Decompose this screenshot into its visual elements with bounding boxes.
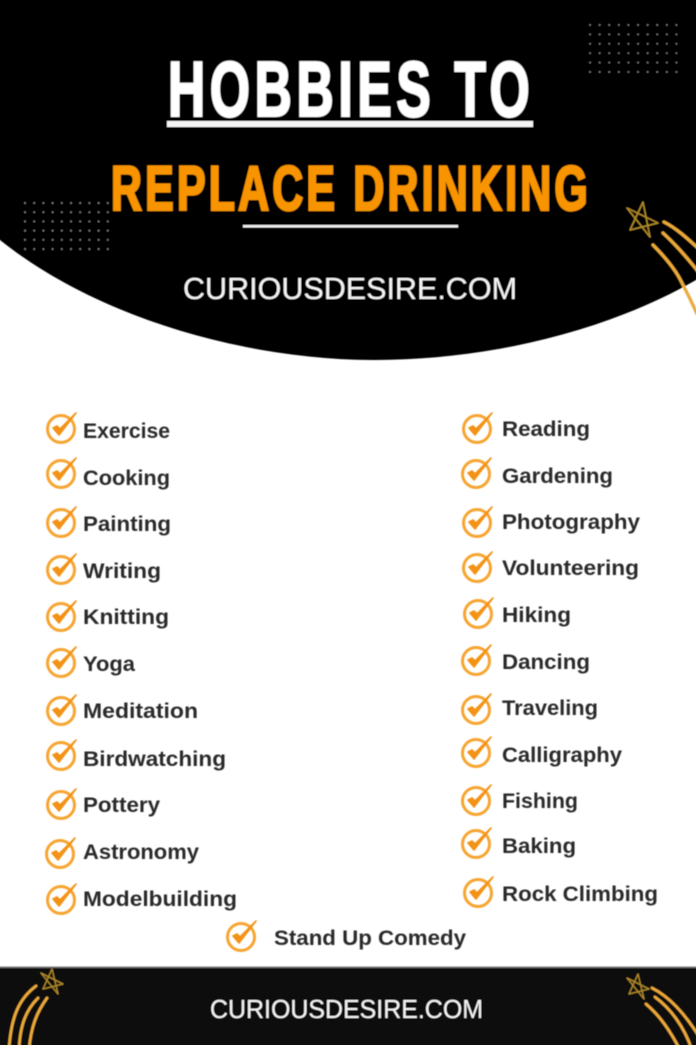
divider line xyxy=(243,225,458,228)
footer bar xyxy=(0,967,696,1045)
item: Cooking xyxy=(48,458,170,490)
item: Volunteering: Volunteering xyxy=(502,557,639,580)
item: Astronomy: Astronomy xyxy=(83,841,199,864)
item: Painting: Painting xyxy=(83,513,171,536)
item: Fishing: Fishing xyxy=(502,790,578,813)
item: Astronomy xyxy=(46,838,199,868)
footer top edge xyxy=(0,966,696,968)
item: Calligraphy: Calligraphy xyxy=(502,744,622,767)
item: Dancing xyxy=(462,645,590,674)
item: Writing xyxy=(48,554,161,584)
item: Gardening: Gardening xyxy=(502,465,613,488)
item: Photography xyxy=(464,507,640,536)
item: Exercise: Exercise xyxy=(83,420,170,443)
item: Knitting xyxy=(48,601,169,630)
item: Hiking xyxy=(464,598,571,628)
item: Rock Climbing xyxy=(464,877,658,906)
item: Birdwatching xyxy=(48,740,226,771)
footer url: CURIOUSDESIRE.COM xyxy=(210,994,483,1024)
item: Volunteering xyxy=(464,552,639,582)
icon: shooting star top right xyxy=(627,202,696,314)
item: Writing: Writing xyxy=(83,560,161,583)
right hobby list xyxy=(462,413,658,906)
item: Yoga: Yoga xyxy=(83,653,135,676)
item: Meditation: Meditation xyxy=(83,700,198,723)
icon: shooting star footer right xyxy=(627,974,696,1045)
item: Stand Up Comedy: Stand Up Comedy xyxy=(274,927,466,950)
item: Baking xyxy=(462,828,576,858)
item: Fishing xyxy=(462,785,578,814)
item: Modelbuilding: Modelbuilding xyxy=(83,888,237,911)
item: Rock Climbing: Rock Climbing xyxy=(502,883,658,906)
dot pattern left xyxy=(23,201,109,251)
item: Traveling xyxy=(462,694,598,724)
website url: CURIOUSDESIRE.COM xyxy=(183,271,517,306)
item: Cooking: Cooking xyxy=(83,467,170,490)
title line 2: REPLACE DRINKING xyxy=(111,154,588,224)
item: Traveling: Traveling xyxy=(502,697,598,720)
item: Reading: Reading xyxy=(502,418,590,441)
item: Modelbuilding xyxy=(48,884,237,914)
title line 1: HOBBIES TO xyxy=(168,46,530,134)
item: Meditation xyxy=(48,695,198,724)
item: Gardening xyxy=(462,458,613,488)
item: Exercise xyxy=(48,413,170,443)
dot pattern top right xyxy=(588,23,680,75)
item: Photography: Photography xyxy=(502,511,640,534)
header black curved panel xyxy=(0,0,696,360)
item: Pottery xyxy=(48,789,160,818)
icon: shooting star footer left xyxy=(9,969,63,1045)
item: Dancing: Dancing xyxy=(502,651,590,674)
item: Stand Up Comedy xyxy=(228,921,466,950)
item: Baking: Baking xyxy=(502,835,576,858)
item: Knitting: Knitting xyxy=(83,606,169,629)
left hobby list xyxy=(46,413,237,914)
item: Reading xyxy=(464,413,590,442)
item: Birdwatching: Birdwatching xyxy=(83,748,226,771)
item: Pottery: Pottery xyxy=(83,794,160,817)
item: Hiking: Hiking xyxy=(502,604,571,627)
item: Calligraphy xyxy=(462,737,622,767)
title underline xyxy=(167,121,533,127)
item: Yoga xyxy=(48,647,135,676)
item: Painting xyxy=(48,507,171,536)
